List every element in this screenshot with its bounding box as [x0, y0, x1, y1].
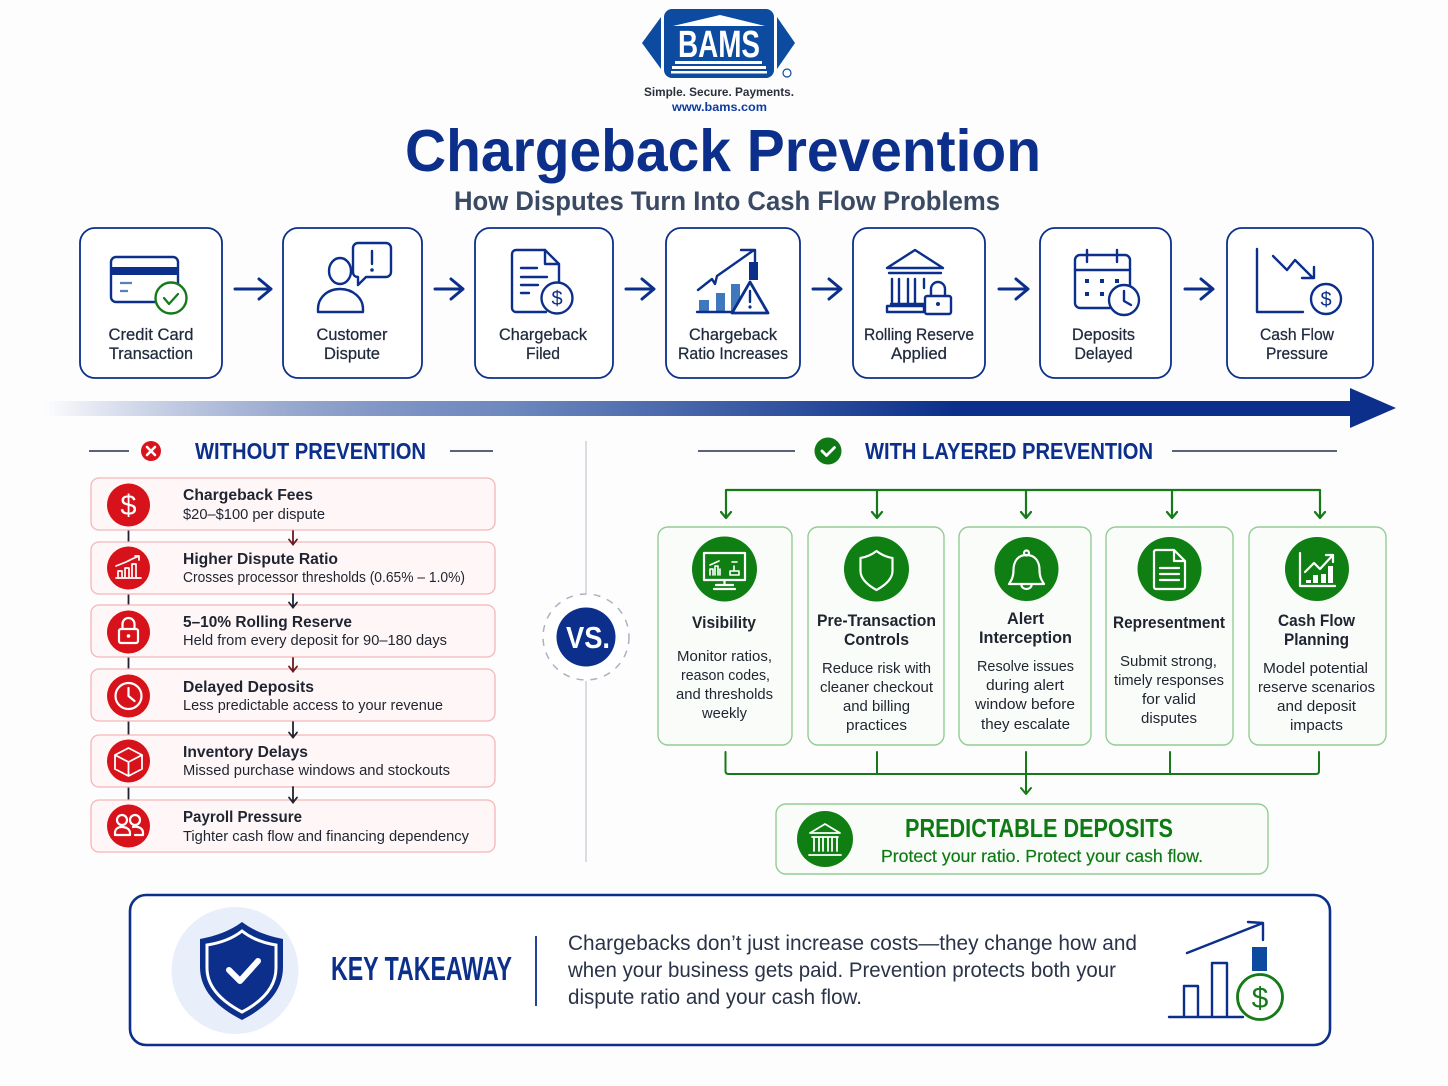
panel: predictable deposits: PREDICTABLE DEPOSITS	[905, 813, 1173, 843]
panel: pre-transaction controls: Pre-Transaction	[817, 612, 936, 630]
panel: cash flow planning: Planning	[1284, 631, 1349, 649]
panel: cash flow planning: and deposit	[1277, 699, 1356, 715]
panel: representment	[1106, 527, 1233, 745]
arrow	[435, 279, 463, 299]
process step: Cash Flow Pressure	[1227, 228, 1373, 378]
icon: document with dollar	[512, 250, 572, 314]
panel: chargeback fees: $20–$100 per dispute	[183, 507, 325, 523]
panel: visibility: reason codes,	[681, 668, 770, 684]
panel: delayed deposits: Less predictable access to your revenue	[183, 698, 443, 714]
icon: document with dollar: $	[551, 288, 563, 310]
panel: payroll pressure: Tighter cash flow and financing dependency	[183, 829, 470, 845]
panel: key takeaway	[130, 895, 1330, 1045]
panel: chargeback fees: Chargeback Fees	[183, 487, 313, 504]
panel: alert interception: Alert	[1007, 610, 1044, 628]
icon: shield check	[172, 907, 298, 1034]
process step: Chargeback Ratio Increases	[666, 228, 800, 378]
panel: visibility: and thresholds	[676, 687, 773, 703]
panel: representment: disputes	[1141, 711, 1197, 727]
process step: Customer Dispute: Dispute	[324, 345, 380, 363]
process step: Rolling Reserve Applied: Applied	[891, 345, 947, 363]
arrow	[813, 279, 841, 299]
panel: visibility	[658, 527, 792, 745]
heading: without prevention	[89, 438, 493, 464]
panel: delayed deposits: Delayed Deposits	[183, 679, 314, 696]
panel: alert interception: Resolve issues	[977, 659, 1074, 675]
process step: Cash Flow Pressure: Pressure	[1266, 345, 1328, 363]
process step: Deposits Delayed: Deposits	[1072, 326, 1135, 344]
panel: rolling reserve	[91, 605, 495, 657]
process step: Chargeback Filed: Filed	[526, 345, 560, 363]
icon: chart with dollar: $	[1252, 982, 1269, 1015]
panel: predictable deposits: Protect your ratio. Protect your cash flow.	[881, 846, 1203, 866]
panel: cash flow planning	[1249, 527, 1386, 745]
icon: bank	[797, 811, 853, 867]
arrow	[1185, 279, 1213, 299]
process step: Chargeback Ratio Increases: Ratio Increases	[678, 345, 788, 363]
title: Chargeback Prevention	[405, 118, 1041, 184]
panel: rolling reserve: 5–10% Rolling Reserve	[183, 614, 352, 631]
panel: cash flow planning: impacts	[1290, 718, 1343, 734]
process step: Credit Card Transaction: Credit Card	[108, 326, 194, 344]
timeline arrow	[45, 388, 1396, 428]
icon: falling chart with dollar	[1257, 249, 1341, 314]
panel: higher dispute ratio	[91, 542, 495, 594]
panel: higher dispute ratio: Higher Dispute Ratio	[183, 551, 338, 568]
panel: cash flow planning: reserve scenarios	[1258, 680, 1375, 696]
arrow	[999, 279, 1028, 299]
icon: calendar with clock	[1075, 250, 1139, 315]
arrow	[235, 279, 271, 299]
panel: predictable deposits	[776, 804, 1268, 874]
vs badge with divider	[543, 441, 629, 862]
panel: representment: Submit strong,	[1120, 654, 1217, 670]
connector: layers merge into deposits	[726, 752, 1319, 794]
panel: alert interception: Interception	[979, 629, 1072, 647]
process step: Deposits Delayed	[1040, 228, 1171, 378]
panel: inventory delays: Missed purchase windows and stockouts	[183, 763, 450, 779]
connector: red rail	[128, 526, 130, 830]
icon: shield	[844, 536, 909, 602]
icon: document	[1138, 537, 1202, 601]
takeaway text: Chargebacks don’t just increase costs—they change how and	[568, 931, 1137, 955]
panel: representment: Representment	[1113, 614, 1225, 632]
logo: BAMS: www.bams.com	[671, 102, 767, 114]
panel: representment: timely responses	[1114, 673, 1224, 689]
panel: pre-transaction controls: cleaner checkout	[820, 680, 933, 696]
panel: visibility: weekly	[701, 706, 748, 722]
process step: Cash Flow Pressure: Cash Flow	[1260, 326, 1334, 344]
heading: without prevention: WITHOUT PREVENTION	[195, 438, 426, 464]
panel: pre-transaction controls: practices	[846, 718, 907, 734]
connector: branches to prevention layers	[721, 490, 1325, 518]
process step: Deposits Delayed: Delayed	[1074, 345, 1132, 363]
process step: Customer Dispute	[283, 228, 422, 378]
panel: visibility: Visibility	[692, 614, 757, 632]
panel: pre-transaction controls: Controls	[844, 631, 909, 649]
panel: pre-transaction controls: Reduce risk with	[822, 661, 931, 677]
arrow	[626, 279, 654, 299]
panel: alert interception	[959, 527, 1091, 745]
icon: bell	[994, 537, 1058, 601]
panel: alert interception: during alert	[986, 678, 1064, 694]
icon: falling chart with dollar: $	[1320, 289, 1332, 311]
logo: BAMS: BAMS	[678, 24, 760, 66]
process step: Rolling Reserve Applied	[853, 228, 985, 378]
panel: pre-transaction controls	[808, 527, 944, 745]
panel: cash flow planning: Cash Flow	[1278, 612, 1355, 630]
process step: Customer Dispute: Customer	[316, 326, 388, 344]
vs badge with divider: VS.	[566, 620, 610, 655]
panel: rolling reserve: Held from every deposit for 90–180 days	[183, 633, 447, 649]
process step: Rolling Reserve Applied: Rolling Reserve	[864, 326, 974, 344]
icon: monitor	[692, 536, 757, 602]
panel: pre-transaction controls: and billing	[843, 699, 910, 715]
panel: alert interception: window before	[974, 697, 1075, 713]
panel: delayed deposits	[91, 669, 495, 721]
panel: chargeback fees	[91, 478, 495, 530]
heading: with layered prevention: WITH LAYERED PREVENTION	[865, 438, 1153, 464]
panel: visibility: Monitor ratios,	[677, 649, 772, 665]
process step: Chargeback Filed: Chargeback	[499, 326, 588, 344]
process step: Credit Card Transaction	[80, 228, 222, 378]
heading: with layered prevention	[698, 438, 1337, 464]
subtitle: How Disputes Turn Into Cash Flow Problems	[454, 186, 1000, 216]
takeaway text	[567, 931, 1137, 1009]
process step: Credit Card Transaction: Transaction	[109, 345, 193, 363]
panel: representment: for valid	[1142, 692, 1196, 708]
panel: cash flow planning: Model potential	[1263, 661, 1368, 677]
panel: inventory delays	[91, 735, 495, 787]
takeaway text: dispute ratio and your cash flow.	[568, 985, 862, 1009]
panel: payroll pressure	[91, 800, 495, 852]
panel: inventory delays: Inventory Delays	[183, 744, 308, 761]
logo: BAMS: Simple. Secure. Payments.	[644, 85, 794, 99]
key takeaway heading: KEY TAKEAWAY	[331, 950, 512, 987]
icon: chart with dollar	[1169, 922, 1282, 1020]
icon: growth chart	[1285, 537, 1349, 601]
process step: Chargeback Ratio Increases: Chargeback	[689, 326, 778, 344]
panel: payroll pressure: Payroll Pressure	[183, 809, 302, 826]
takeaway text: when your business gets paid. Prevention protects both your	[567, 958, 1116, 982]
connectors: downward arrows between rows	[289, 531, 297, 802]
process step: Chargeback Filed	[475, 228, 613, 378]
icon: credit card	[111, 257, 186, 314]
icon: person with alert bubble	[318, 243, 391, 312]
panel: higher dispute ratio: Crosses processor thresholds (0.65% – 1.0%)	[183, 570, 465, 586]
icon: rising chart with warning	[697, 250, 768, 313]
panel: chargeback fees: $	[120, 490, 137, 522]
logo: BAMS	[642, 9, 795, 114]
panel: alert interception: they escalate	[981, 717, 1070, 733]
icon: bank with lock	[887, 250, 951, 314]
